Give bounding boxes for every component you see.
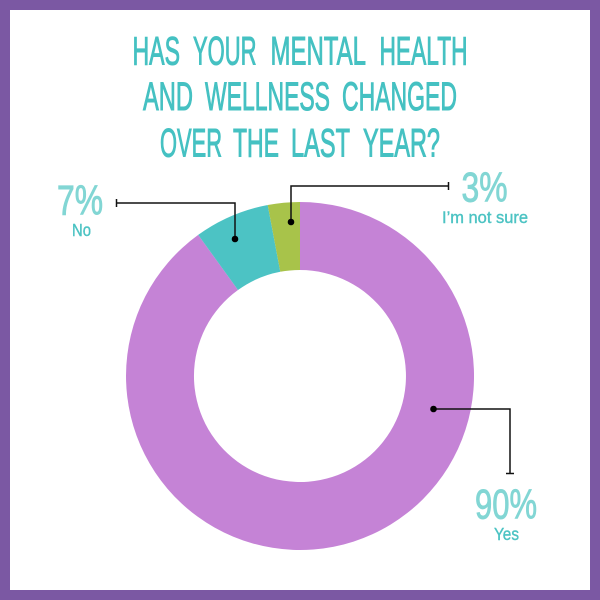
title: MENTAL — [270, 30, 366, 74]
leader line: yes — [430, 406, 514, 474]
title — [132, 30, 468, 166]
label: 7% no — [57, 176, 103, 240]
segment: no 7% — [198, 205, 280, 290]
label: 3% not sure: 3% — [462, 164, 508, 210]
title: WELLNESS — [205, 75, 330, 119]
title: HEALTH — [380, 30, 468, 74]
leader line: not sure — [288, 182, 448, 225]
label: 7% no: No — [72, 220, 91, 240]
title: CHANGED — [342, 75, 457, 119]
title: OVER — [160, 122, 222, 166]
label: 90% yes: Yes — [494, 524, 519, 544]
title: LAST — [291, 122, 350, 166]
title: YOUR — [193, 30, 256, 74]
label: 90% yes: 90% — [475, 480, 537, 528]
label: 3% not sure: I’m not sure — [442, 208, 528, 227]
title: AND — [143, 75, 193, 119]
title: THE — [233, 122, 279, 166]
label: 90% yes — [475, 480, 537, 544]
segment: not sure 3% — [268, 202, 300, 272]
title: HAS — [132, 30, 180, 74]
leader line: no — [116, 199, 238, 242]
label: 7% no: 7% — [57, 176, 103, 224]
donut chart — [126, 202, 474, 550]
segment: yes 90% — [126, 202, 474, 550]
title: YEAR? — [363, 122, 440, 166]
label: 3% not sure — [442, 164, 528, 227]
